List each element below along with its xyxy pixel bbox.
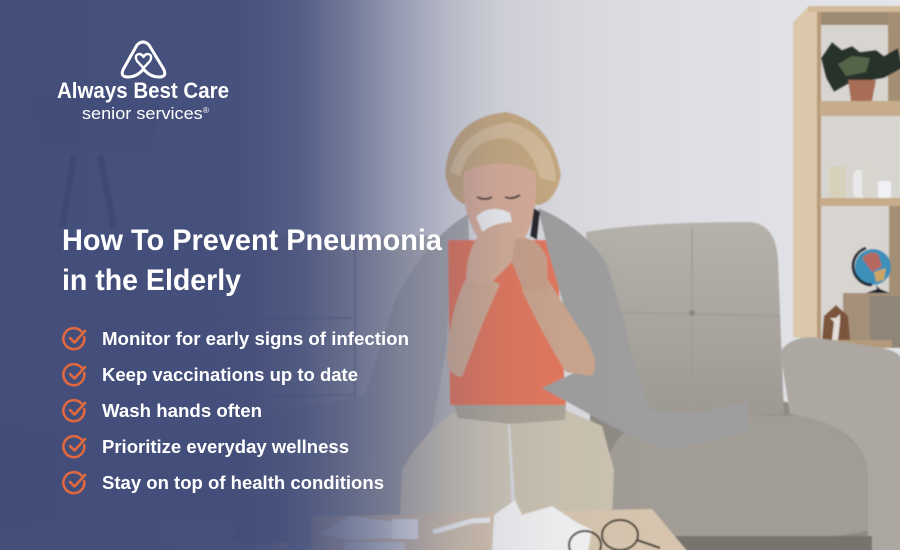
deer ornament	[822, 305, 850, 340]
item: vaccinations: Keep vaccinations up to date	[102, 364, 358, 385]
thermometer	[433, 520, 490, 532]
hair and face	[445, 112, 561, 244]
title: How To Prevent Pneumonia	[62, 224, 442, 257]
crumpled tissues	[492, 500, 592, 550]
sofa right arm	[780, 337, 900, 550]
title: in the Elderly	[62, 264, 241, 297]
orange shirt	[448, 240, 566, 405]
logo tagline: ®	[203, 106, 209, 115]
coffee table	[8, 509, 688, 550]
pill packs	[320, 516, 418, 550]
right sofa backing	[590, 400, 872, 550]
logo tagline: senior services	[82, 104, 195, 123]
right sofa back cushion	[586, 222, 784, 424]
candles	[829, 166, 891, 198]
item: wash hands: Wash hands often	[102, 400, 262, 421]
blanket left	[238, 214, 470, 456]
pants	[400, 405, 614, 516]
item: early signs: Monitor for early signs of infection	[102, 328, 409, 349]
hands	[466, 224, 548, 292]
globe	[853, 248, 891, 293]
logo icon	[122, 42, 165, 77]
tissue	[476, 209, 512, 235]
logo	[57, 42, 229, 123]
dark collar	[530, 208, 540, 240]
lamp	[20, 90, 165, 228]
plant on shelf	[821, 42, 900, 101]
sofa seat cushion	[606, 415, 872, 541]
bottle	[289, 503, 311, 550]
arms	[447, 272, 595, 377]
item: health conditions: Stay on top of health conditions	[102, 472, 384, 493]
glasses	[569, 520, 660, 550]
checklist	[63, 328, 409, 493]
blanket right	[538, 208, 750, 450]
mug	[232, 490, 290, 544]
item: everyday wellness: Prioritize everyday wellness	[102, 436, 349, 457]
left sofa	[0, 236, 460, 535]
title	[62, 224, 442, 297]
logo wordmark: Always Best Care	[57, 78, 229, 103]
bookshelf	[793, 6, 900, 348]
